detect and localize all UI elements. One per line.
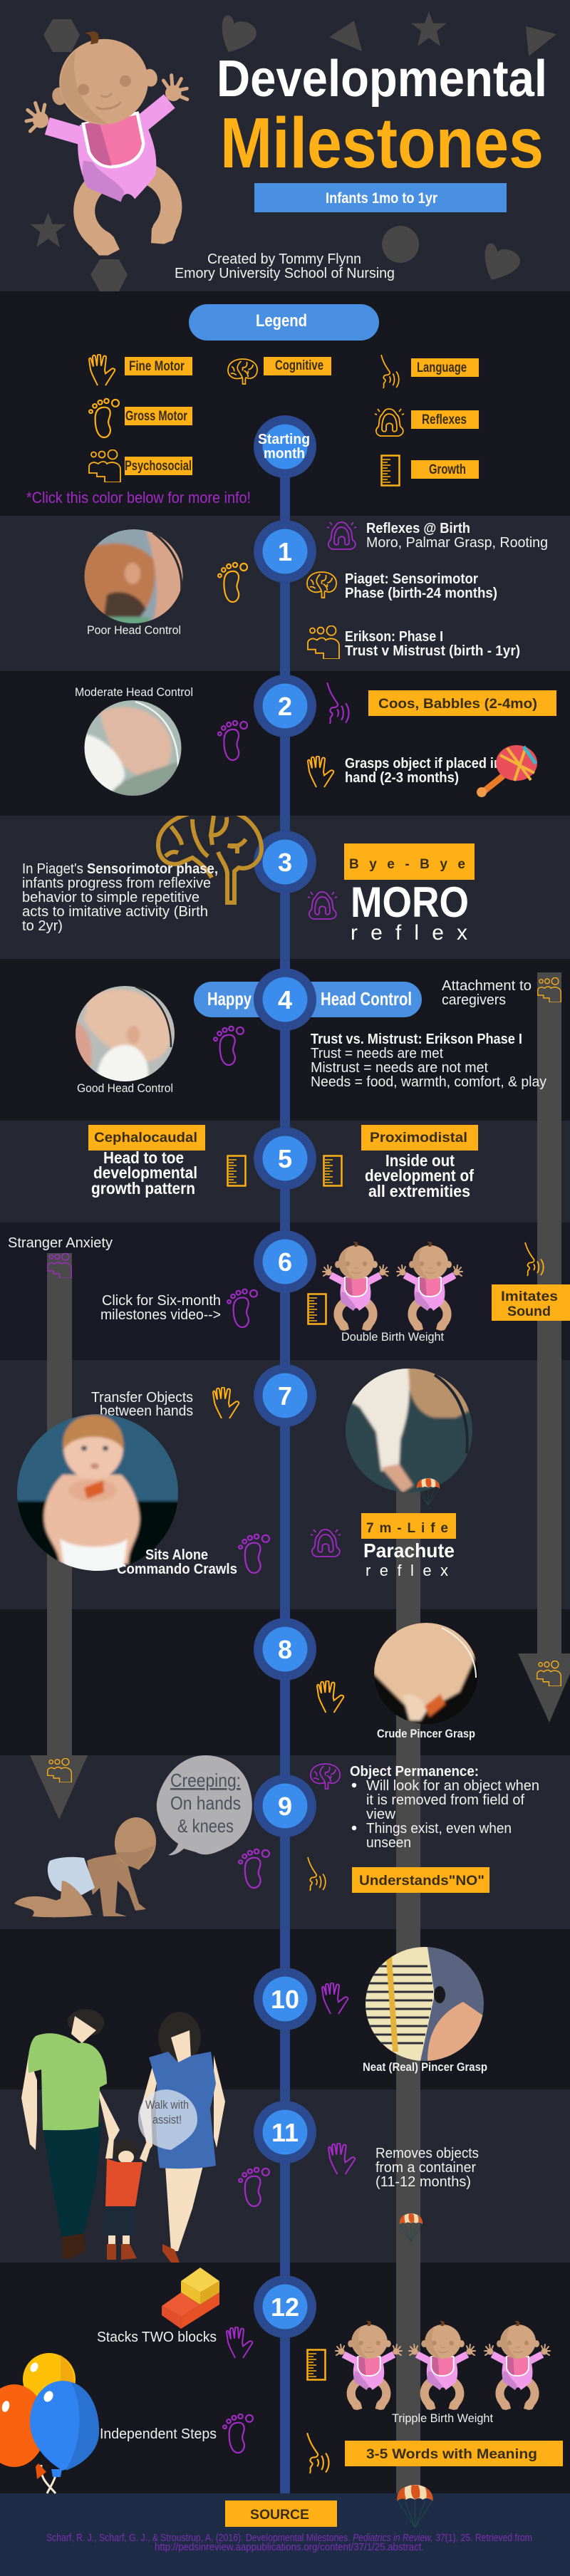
badge: source: SOURCE — [250, 2508, 309, 2523]
caption: Good Head Control — [77, 1081, 173, 1095]
icon: language nose — [308, 1857, 326, 1891]
credits: Emory University School of Nursing — [175, 266, 395, 281]
illustration: baby two — [397, 1242, 462, 1331]
panel: month 1 — [80, 520, 548, 659]
subtitle banner — [254, 183, 507, 212]
decorative shape: hexagon — [43, 19, 80, 52]
panel: source — [46, 2485, 532, 2553]
text: trust vs mistrust: Trust vs. Mistrust: Erikson Phase I — [311, 1032, 522, 1047]
text: transfer objects — [91, 1390, 193, 1419]
marker: month 2 — [254, 675, 316, 737]
panel: legend — [26, 304, 479, 507]
caption: Double Birth Weight — [341, 1330, 444, 1344]
icon: foot purple — [239, 2168, 269, 2206]
speech bubble: creeping: & knees — [177, 1815, 234, 1837]
decorative shape: star lower — [30, 212, 66, 247]
marker: month 1: 1 — [278, 537, 292, 566]
panel: month 4 background — [0, 959, 570, 1121]
citation: http://pedsinreview.aappublications.org/content/37/1/25.abstract. — [155, 2541, 424, 2553]
panel: month 1 background — [0, 516, 570, 671]
panel: header background — [0, 0, 570, 291]
marker: month 2: 2 — [278, 692, 292, 721]
text: removes objects: from a container — [375, 2160, 476, 2176]
arrow: grey parachute reflex bar — [396, 1425, 420, 2493]
decorative shape: heart — [222, 15, 256, 52]
panel: month 6 — [8, 1230, 570, 1344]
text: erikson: Trust v Mistrust (birth - 1yr) — [345, 643, 520, 659]
icon: reflex purple — [327, 522, 356, 549]
panel: month 11 — [21, 2009, 479, 2263]
photo: parachute reflex baby — [346, 1368, 472, 1492]
marker: month 5: 5 — [278, 1144, 292, 1173]
text: attachment: caregivers — [442, 992, 506, 1008]
caption: Crude Pincer Grasp — [377, 1727, 475, 1740]
text: stranger anxiety: Stranger Anxiety — [8, 1235, 113, 1251]
legend item: gross motor — [89, 399, 192, 437]
icon: hand purple — [328, 2143, 355, 2174]
text: reflex: reflex — [366, 1562, 448, 1579]
panel: month 2 — [75, 675, 556, 799]
marker: starting month: Starting — [258, 432, 310, 447]
marker: month 11: 11 — [271, 2118, 299, 2147]
note: click colour: *Click this color below for more info! — [26, 489, 251, 507]
legend item: psychosocial: Psychosocial — [125, 459, 192, 474]
marker: month 12: 12 — [271, 2292, 299, 2322]
illustration: baby two — [409, 2321, 475, 2410]
badge: proximodistal: Proximodistal — [370, 1131, 467, 1146]
text: sits alone: Commando Crawls — [117, 1562, 237, 1577]
icon: ruler right — [323, 1155, 342, 1185]
marker: month 5 — [254, 1127, 316, 1190]
speech bubble: walk with assist: Walk with — [145, 2098, 189, 2112]
badge: words with meaning: 3-5 Words with Meaning — [366, 2447, 537, 2462]
text: reflexes at birth: Reflexes @ Birth — [366, 521, 470, 536]
text: stacks two blocks: Stacks TWO blocks — [97, 2330, 217, 2345]
marker: month 4 — [254, 968, 316, 1031]
caption: Neat (Real) Pincer Grasp — [363, 2060, 487, 2074]
panel: month 6 background — [0, 1222, 570, 1360]
marker: month 9 — [254, 1775, 316, 1837]
legend heading pill — [189, 304, 379, 341]
legend item: reflexes: Reflexes — [422, 412, 467, 427]
arrow: grey left psychosocial arrow — [30, 1253, 88, 1819]
credits: Created by Tommy Flynn — [207, 251, 361, 267]
icon: reflex purple — [311, 1530, 341, 1557]
text: sits alone: Sits Alone — [145, 1547, 208, 1563]
icon: brain purple — [311, 1764, 340, 1789]
badge: cephalocaudal: Cephalocaudal — [94, 1131, 197, 1146]
panel: month 3 background — [0, 816, 570, 959]
icon: hand purple — [227, 2327, 252, 2358]
marker: month 10 — [254, 1968, 316, 2030]
photo: moderate head control — [84, 700, 181, 796]
text: erikson: Erikson: Phase I — [345, 629, 443, 645]
marker: starting month — [254, 415, 316, 478]
text: object permanence: unseen — [366, 1835, 411, 1851]
text: six month video: milestones video--> — [100, 1307, 221, 1323]
legend item: language — [381, 355, 479, 388]
icon: language nose — [307, 2433, 329, 2473]
icon: ruler left — [228, 1155, 245, 1185]
illustration: small parachute — [417, 1478, 440, 1505]
marker: month 12 — [254, 2275, 316, 2338]
speech bubble: creeping: On hands — [170, 1792, 241, 1814]
badge: 7m-life — [361, 1513, 456, 1539]
badge: coos babbles — [368, 690, 556, 716]
badge: bye-bye: Bye-Bye — [349, 857, 465, 872]
text: reflexes at birth — [366, 521, 548, 551]
marker: month 10: 10 — [271, 1985, 299, 2014]
marker: starting month: month — [264, 446, 305, 462]
panel: month 10 background — [0, 1929, 570, 2089]
text: six month video: Click for Six-month — [102, 1293, 221, 1309]
marker: month 4: 4 — [278, 985, 292, 1014]
text: reflexes at birth: Moro, Palmar Grasp, Rooting — [366, 535, 548, 551]
text: head to toe: Head to toe — [103, 1148, 184, 1167]
panel: month 5 background — [0, 1121, 570, 1222]
text: object permanence: it is removed from field of — [366, 1792, 524, 1808]
text: object permanence: Will look for an object when — [366, 1778, 539, 1794]
legend item: gross motor: Gross Motor — [125, 409, 187, 424]
decorative shape: triangle right — [526, 26, 556, 56]
text: grasps object: Grasps object if placed in — [345, 756, 502, 772]
text: inside out: Inside out — [385, 1151, 455, 1170]
text: trust vs mistrust: Trust = needs are met — [311, 1046, 443, 1061]
panel: month 4 — [71, 968, 561, 1095]
decorative shape: circle — [382, 226, 419, 263]
icon: large brain — [158, 814, 261, 903]
caption: Poor Head Control — [87, 623, 181, 637]
photo: neat pincer grasp — [366, 1947, 484, 2062]
text: transfer objects: Transfer Objects — [91, 1390, 193, 1406]
legend item: reflexes — [375, 409, 479, 436]
pill: happy head control — [194, 982, 422, 1017]
legend item: language: Language — [417, 360, 467, 375]
text: object permanence: Object Permanence: — [350, 1764, 479, 1780]
text: six month video — [100, 1293, 221, 1323]
badge: proximodistal — [361, 1125, 478, 1151]
icon: hand — [317, 1681, 343, 1713]
icon: fine motor hand — [308, 756, 333, 787]
badge: imitates sound: Imitates — [501, 1289, 558, 1304]
text: piaget — [345, 571, 497, 601]
decorative shape: heart lower — [485, 243, 520, 280]
panel: month 8 background — [0, 1609, 570, 1755]
text: grasps object: hand (2-3 months) — [345, 770, 459, 786]
speech bubble: creeping — [157, 1755, 252, 1855]
heading: moro: MORO — [351, 878, 469, 926]
text: piaget sensorimotor paragraph: acts to imitative activity (Birth — [22, 904, 208, 920]
text: object permanence — [350, 1764, 539, 1851]
icon: foot purple — [239, 1534, 269, 1573]
decorative shape: star — [411, 11, 447, 46]
marker: month 7 — [254, 1364, 316, 1427]
caption: Tripple Birth Weight — [392, 2411, 493, 2425]
timeline spine — [280, 463, 290, 2493]
marker: month 3: 3 — [278, 848, 292, 877]
badge: coos babbles: Coos, Babbles (2-4mo) — [378, 697, 537, 712]
text: head to toe — [91, 1148, 197, 1198]
legend item: fine motor — [89, 354, 192, 385]
icon: psychosocial on arrow — [538, 977, 561, 1002]
panel: header — [11, 11, 556, 291]
marker: month 7: 7 — [278, 1381, 292, 1411]
text: object permanence: view — [366, 1807, 396, 1822]
icon: gross motor foot — [214, 1027, 244, 1065]
icon: psychosocial on arrow — [48, 1758, 71, 1782]
illustration: stacked blocks — [162, 2268, 219, 2329]
panel: month 12 background — [0, 2263, 570, 2493]
speech bubble: walk with assist — [138, 2089, 197, 2150]
legend item: fine motor: Fine Motor — [129, 359, 185, 374]
text: inside out: development of — [365, 1166, 474, 1185]
panel: month 7 — [13, 1364, 476, 1579]
badge: understands no: Understands"NO" — [359, 1874, 484, 1889]
panel: month 8 — [254, 1618, 561, 1740]
arrow: grey right psychosocial arrow — [518, 972, 570, 1723]
icon: hand — [213, 1387, 239, 1418]
text: piaget sensorimotor paragraph: In Piaget's Sensorimotor phase, — [22, 861, 218, 877]
icon: language nose — [525, 1242, 544, 1276]
photo: good head control — [76, 986, 175, 1081]
marker: month 9: 9 — [278, 1792, 292, 1821]
icon: foot purple — [227, 1289, 257, 1327]
icon: gross motor foot — [218, 563, 247, 602]
heading: parachute: Parachute — [363, 1539, 455, 1562]
panel: month 9 — [14, 1755, 539, 1917]
illustration: baby one — [323, 1242, 388, 1331]
panel: month 12 — [0, 2268, 563, 2493]
text: grasps object — [345, 756, 502, 786]
text: independent steps: Independent Steps — [100, 2426, 217, 2442]
icon: ruler — [308, 1294, 326, 1324]
badge: source — [225, 2500, 337, 2527]
pill: happy head control: Head Control — [321, 988, 412, 1009]
panel: month 11 background — [0, 2089, 570, 2263]
text: piaget sensorimotor paragraph: infants progress from reflexive — [22, 876, 211, 891]
legend item: growth — [382, 456, 479, 486]
text: inside out — [365, 1151, 474, 1200]
icon: foot purple — [239, 1849, 269, 1888]
text: removes objects: Removes objects — [375, 2146, 479, 2161]
text: erikson — [345, 629, 520, 659]
text: trust vs mistrust — [311, 1032, 546, 1090]
marker: month 6: 6 — [278, 1247, 292, 1277]
illustration: mid parachute — [400, 2213, 423, 2242]
panel: month 3 — [22, 814, 475, 945]
panel: month 9 background — [0, 1755, 570, 1929]
speech bubble: walk with assist: assist! — [152, 2113, 182, 2126]
decorative shape: triangle — [329, 21, 362, 51]
badge: words with meaning — [345, 2441, 563, 2466]
illustration: crawling baby — [14, 1816, 158, 1917]
photo: crude pincer grasp — [374, 1623, 478, 1724]
icon: psychosocial — [308, 626, 339, 659]
credits — [175, 251, 395, 281]
icon: psychosocial on arrow — [537, 1661, 561, 1686]
panel: legend background — [0, 291, 570, 516]
text: piaget: Piaget: Sensorimotor — [345, 571, 478, 587]
text: trust vs mistrust: Needs = food, warmth, comfort, & play — [311, 1074, 546, 1090]
text: piaget sensorimotor paragraph: to 2yr) — [22, 918, 63, 934]
illustration: baby three — [484, 2321, 550, 2410]
icon: ruler — [308, 2349, 325, 2379]
speech bubble: creeping: Creeping: — [170, 1770, 241, 1791]
illustration: baby — [11, 15, 217, 266]
marker: month 11 — [254, 2101, 316, 2164]
text: sits alone — [117, 1547, 237, 1577]
illustration: family walking — [21, 2009, 225, 2263]
panel: month 5 — [88, 1125, 478, 1200]
panel: month 10 — [254, 1947, 487, 2074]
text: head to toe: developmental — [93, 1163, 197, 1182]
icon: hand purple — [322, 1983, 348, 2014]
panel: month 2 background — [0, 671, 570, 816]
marker: month 3 — [254, 831, 316, 893]
badge: imitates sound — [492, 1284, 570, 1321]
icon: language nose — [327, 682, 349, 724]
text: piaget sensorimotor paragraph — [22, 861, 218, 934]
text: removes objects — [375, 2146, 479, 2190]
pill: happy head control: Happy — [207, 988, 252, 1009]
subtitle banner: Infants 1mo to 1yr — [326, 190, 437, 207]
illustration: large parachute — [397, 2485, 433, 2528]
badge: cephalocaudal — [88, 1125, 205, 1151]
badge: 7m-life: 7m-Life — [366, 1521, 448, 1536]
legend item: psychosocial — [89, 450, 192, 482]
legend heading pill: Legend — [256, 311, 307, 331]
legend item: cognitive: Cognitive — [275, 358, 323, 373]
text: piaget sensorimotor paragraph: behavior to simple repetitive — [22, 890, 200, 905]
legend item: cognitive — [228, 357, 331, 384]
citation: Scharf, R. J., Scharf, G. J., & Stroustrup, A. (2016). Developmental Milestones. Pediatrics in Review, 37(1), 25. Retrieved from — [46, 2532, 532, 2544]
illustration: baby one — [336, 2321, 402, 2410]
panel: month 7 background — [0, 1360, 570, 1609]
illustration: rattle — [477, 745, 537, 797]
badge: imitates sound: Sound — [507, 1304, 551, 1319]
marker: month 8 — [254, 1618, 316, 1681]
marker: month 1 — [254, 520, 316, 583]
icon: cognitive brain — [307, 572, 336, 598]
photo: poor head control — [84, 529, 182, 623]
citation — [46, 2532, 532, 2553]
icon: psychosocial purple — [48, 1253, 71, 1278]
text: inside out: all extremities — [368, 1182, 470, 1200]
photo: baby sitting alone — [13, 1411, 182, 1575]
marker: month 6 — [254, 1230, 316, 1293]
text: attachment: Attachment to — [442, 978, 532, 994]
badge: understands no — [352, 1867, 489, 1893]
caption: Moderate Head Control — [75, 685, 193, 699]
badge: bye-bye — [344, 843, 475, 880]
panel: source footer background — [0, 2493, 570, 2576]
icon: gross motor foot — [218, 721, 247, 760]
icon: foot purple — [223, 2414, 253, 2453]
illustration: balloons — [0, 2353, 99, 2493]
text: trust vs mistrust: Mistrust = needs are not met — [311, 1060, 488, 1076]
text: attachment — [442, 978, 532, 1008]
text: transfer objects: between hands — [100, 1403, 193, 1419]
legend item: growth: Growth — [429, 462, 466, 477]
decorative shape: hexagon lower — [90, 259, 128, 291]
text: removes objects: (11-12 months) — [375, 2174, 471, 2190]
text: reflex: reflex — [351, 921, 467, 945]
text: object permanence: Things exist, even when — [366, 1821, 512, 1837]
marker: month 8: 8 — [278, 1635, 292, 1664]
icon: reflex purple — [308, 892, 337, 919]
text: head to toe: growth pattern — [91, 1179, 195, 1198]
text: piaget: Phase (birth-24 months) — [345, 586, 497, 601]
